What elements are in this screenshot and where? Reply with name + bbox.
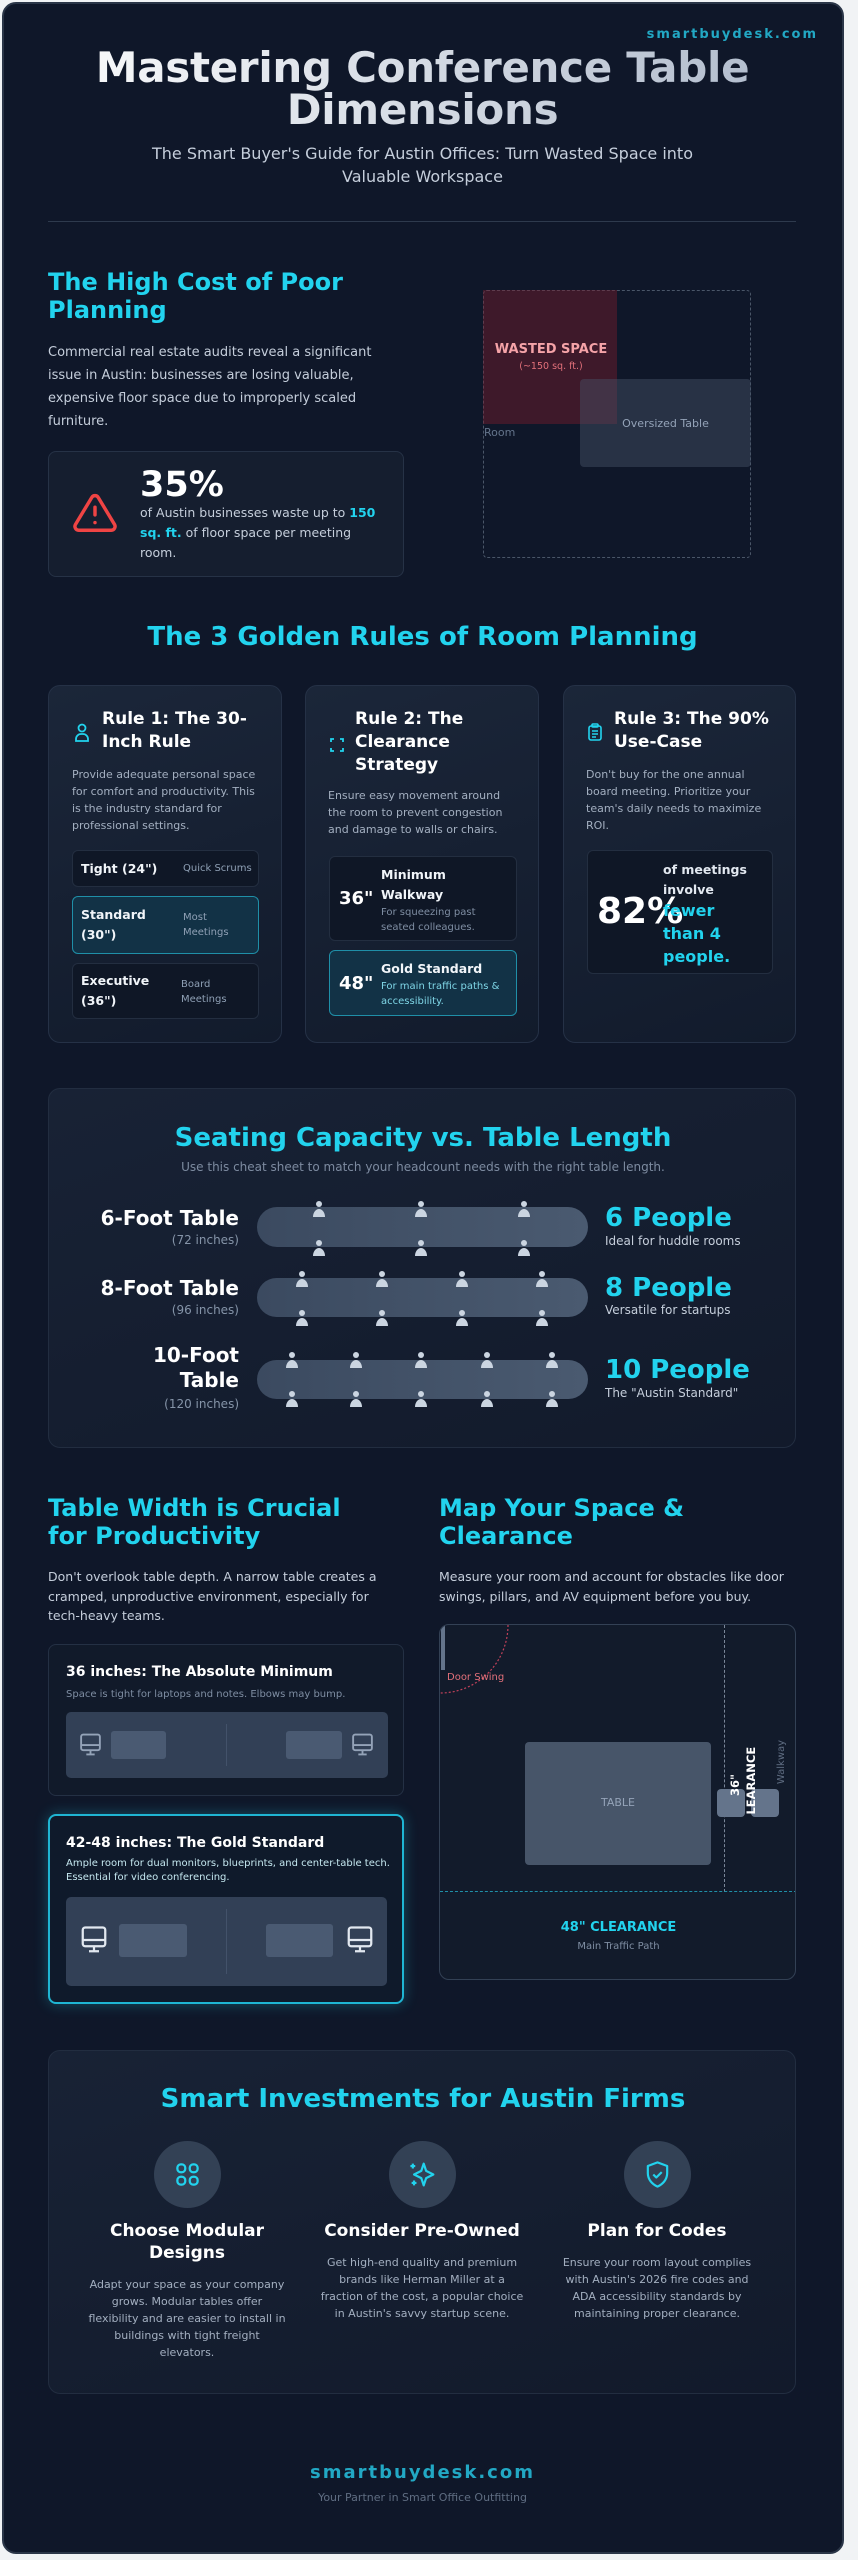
column: codes: Plan for Codes [587,2221,727,2241]
illustration: wasted space [483,290,751,558]
row standard: Meetings [183,927,229,938]
row tight: Quick Scrums [183,863,252,874]
title: Dimensions [287,85,558,134]
box 48: accessibility. [381,996,444,1007]
floor plan diagram: Main Traffic Path [577,1941,660,1952]
column: modular: Adapt your space as your company [90,2278,284,2291]
heading: table width: Table Width is Crucial [48,1494,341,1522]
row: 10-foot: Table [180,1368,239,1392]
table label: Oversized Table [622,417,709,430]
footer brand: smartbuydesk.com [310,2462,535,2483]
icon: expand [330,738,344,752]
box 48: Gold Standard [381,961,482,976]
row: 8-foot: (96 inches) [172,1303,239,1317]
rule desc [328,789,502,836]
rule title: Strategy [355,755,438,775]
column: codes: ADA accessibility standards by [573,2290,741,2303]
table [525,1742,711,1865]
panel: rule 3 [563,685,796,1043]
row: 10-foot: The "Austin Standard" [605,1386,738,1400]
section: high cost heading: Planning [48,296,167,324]
row: 6-foot: 6-Foot Table [101,1206,239,1230]
vertical clearance line [724,1625,725,1892]
icon: sparkle [389,2141,456,2208]
rule desc: the room to prevent congestion [328,806,502,819]
section: high cost heading: The High Cost of Poor [48,268,343,296]
title: Mastering Conference Table [96,43,749,92]
box 48: 48" [339,973,373,994]
icon: clipboard [588,723,602,741]
column: modular [88,2141,286,2359]
panel: rule 1 [48,685,282,1043]
wasted space block [483,290,617,424]
column: modular: Designs [149,2243,225,2263]
brand top: smartbuydesk.com [647,27,818,42]
stat box 82%: involve [663,882,714,897]
stat box 82%: 82% [597,891,683,932]
text: table width: cramped, unproductive environment, especially for [48,1588,369,1604]
heading: map your space: Map Your Space & [439,1494,684,1522]
title [0,47,845,131]
rule title: Use-Case [614,732,702,752]
column: codes: Ensure your room layout complies [563,2256,751,2269]
stat text: of Austin businesses waste up to 150 [140,505,375,520]
stat box 82%: of meetings [663,862,747,877]
floor plan diagram: Door Swing [447,1672,504,1683]
room label: Room [484,426,515,439]
footer tagline: Your Partner in Smart Office Outfitting [318,2491,527,2504]
seats [296,1271,548,1326]
rule desc: board meeting. Prioritize your [586,785,750,798]
text: map your space: swings, pillars, and AV equipment before you buy. [439,1588,751,1604]
row: 10-foot [153,1343,750,1411]
heading: Smart Investments for Austin Firms [161,2084,685,2114]
stat text [140,505,375,560]
box: 36 inches: 36 inches: The Absolute Minimum [66,1664,333,1680]
rule desc: and damage to walls or chairs. [328,823,498,836]
stat box 82% [587,850,773,974]
stat box 82%: fewer [663,901,714,920]
heading: map your space [439,1494,684,1550]
heading: map your space: Clearance [439,1522,573,1550]
stat box 82%: than 4 [663,924,721,943]
row: 6-foot [101,1201,741,1256]
box 36 [329,856,517,941]
heading: Seating Capacity vs. Table Length [175,1123,671,1153]
text: table width: Don't overlook table depth. A narrow table creates a [48,1569,377,1584]
section: high cost paragraph: Commercial real estate audits reveal a significant [48,345,371,360]
box 36: For squeezing past [381,907,476,918]
rule title [102,709,247,752]
illustration: wasted space: (~150 sq. ft.) [519,361,583,372]
column: pre-owned: Consider Pre-Owned [324,2221,520,2241]
stat box 82%: people. [663,947,730,966]
horizontal clearance line [440,1891,797,1892]
rule desc: Provide adequate personal space [72,768,255,781]
wasted label: WASTED SPACE [495,342,607,357]
seats [286,1352,558,1407]
oversized table [580,379,751,467]
row standard: (30") [81,927,116,942]
stat number: 35% [140,465,224,505]
rule desc: for comfort and productivity. This [72,785,255,798]
icon: grid [154,2141,221,2208]
column: modular: Choose Modular [110,2221,264,2241]
column: pre-owned: in Austin's savvy startup scene. [335,2307,509,2320]
rule desc: team's daily needs to maximize [586,802,761,815]
subtitle [152,144,693,186]
box: 42-48 inches: 42-48 inches: The Gold Standard [66,1835,324,1851]
panel: smart investments [48,2050,796,2394]
column: codes: maintaining proper clearance. [574,2307,740,2320]
column: codes: with Austin's 2026 fire codes and [565,2273,749,2286]
row: 6-foot: (72 inches) [172,1233,239,1247]
box: 42-48 inches [48,1814,404,2004]
column: modular: grows. Modular tables offer [112,2295,262,2308]
heading: table width: for Productivity [48,1522,260,1550]
chairs [717,1789,745,1817]
row standard: Standard [81,907,146,922]
desk illustration narrow [66,1712,388,1778]
row executive [72,963,259,1019]
subtitle: The Smart Buyer's Guide for Austin Offices: Turn Wasted Space into [152,144,693,163]
desk illustration wide [66,1897,387,1986]
panel: rule 2 [305,685,539,1043]
row: 10-foot: 10 People [605,1355,750,1385]
rule desc: is the industry standard for [72,802,222,815]
subtitle: Valuable Workspace [342,167,503,186]
floor plan diagram [439,1624,796,1980]
column: pre-owned: fraction of the cost, a popular choice [321,2290,523,2303]
rule desc: Ensure easy movement around [328,789,500,802]
door [441,1625,445,1670]
row executive: Meetings [181,994,227,1005]
box: 42-48 inches: Ample room for dual monitors, blueprints, and center-table tech. [66,1858,390,1869]
box 48: For main traffic paths & [381,981,499,992]
stat text: sq. ft. of floor space per meeting [140,525,351,540]
rule title: Inch Rule [102,732,191,752]
rule title [355,709,463,775]
floor plan diagram: TABLE [601,1796,635,1809]
rule desc: Don't buy for the one annual [586,768,745,781]
box: 36 inches: Space is tight for laptops and notes. Elbows may bump. [66,1689,345,1700]
section: high cost paragraph: expensive floor space due to improperly scaled [48,391,356,406]
row: 8-foot [101,1271,732,1326]
row tight [72,850,259,887]
rule title: Rule 2: The [355,709,463,729]
column: modular: buildings with tight freight [114,2329,260,2342]
box 36: 36" [339,888,373,909]
row: 8-foot: 8-Foot Table [101,1276,239,1300]
box 36: Minimum [381,867,446,882]
rule title: Clearance [355,732,450,752]
rule title: Rule 3: The 90% [614,709,769,729]
rule desc [72,768,255,832]
rule desc: ROI. [586,819,609,832]
icon: warning [73,494,117,532]
row: 6-foot: 6 People [605,1203,732,1233]
rule title: Rule 1: The 30- [102,709,247,729]
rule desc: professional settings. [72,819,190,832]
row: 8-foot: 8 People [605,1273,732,1303]
column: modular: elevators. [160,2346,214,2359]
text: map your space [439,1569,784,1604]
row: 8-foot: Versatile for startups [605,1303,731,1317]
text: table width: tech-heavy teams. [48,1608,165,1623]
section: high cost heading [48,268,343,324]
box: 42-48 inches: Essential for video conferencing. [66,1872,230,1883]
row: 10-foot: 10-Foot [153,1343,239,1367]
36 clearance label rotated [728,1747,758,1814]
text: map your space: Measure your room and account for obstacles like door [439,1569,784,1584]
row executive: Executive [81,973,149,988]
row executive: Board [181,979,210,990]
icon: person [75,724,89,742]
heading: table width [48,1494,341,1550]
stat text: room. [140,545,176,560]
column: pre-owned: Get high-end quality and premium [327,2256,517,2269]
row tight: Tight (24") [81,861,157,876]
48 clearance label: 48" CLEARANCE [561,1920,676,1935]
row: 6-foot: Ideal for huddle rooms [605,1234,741,1248]
floor plan diagram: Walkway [776,1740,787,1784]
row standard: Most [183,912,207,923]
row: 10-foot: (120 inches) [164,1397,239,1411]
box: 36 inches [48,1644,404,1796]
icon: shield [624,2141,691,2208]
box 36: seated colleagues. [381,922,475,933]
text: table width [48,1569,377,1623]
36 clearance label rotated: 36" [728,1774,742,1796]
box 36: Walkway [381,887,443,902]
row executive: (36") [81,993,116,1008]
box 48 [329,950,517,1016]
rule desc [586,768,761,832]
column: pre-owned [321,2141,523,2320]
rule title [614,709,769,752]
column: pre-owned: brands like Herman Miller at a [339,2273,505,2286]
section heading: golden rules: The 3 Golden Rules of Room Planning [147,622,698,652]
section: high cost paragraph: issue in Austin: businesses are losing valuable, [48,368,354,383]
stat box 35% [48,451,404,577]
seats [313,1201,530,1256]
door swing arc [440,1625,509,1694]
column: codes [563,2141,751,2320]
subheading: Use this cheat sheet to match your headcount needs with the right table length. [181,1160,665,1174]
section: high cost paragraph [48,345,372,429]
section: high cost paragraph: furniture. [48,414,108,429]
column: modular: flexibility and are easier to install in [88,2312,286,2325]
panel: seating capacity [48,1088,796,1448]
row standard [72,896,259,954]
